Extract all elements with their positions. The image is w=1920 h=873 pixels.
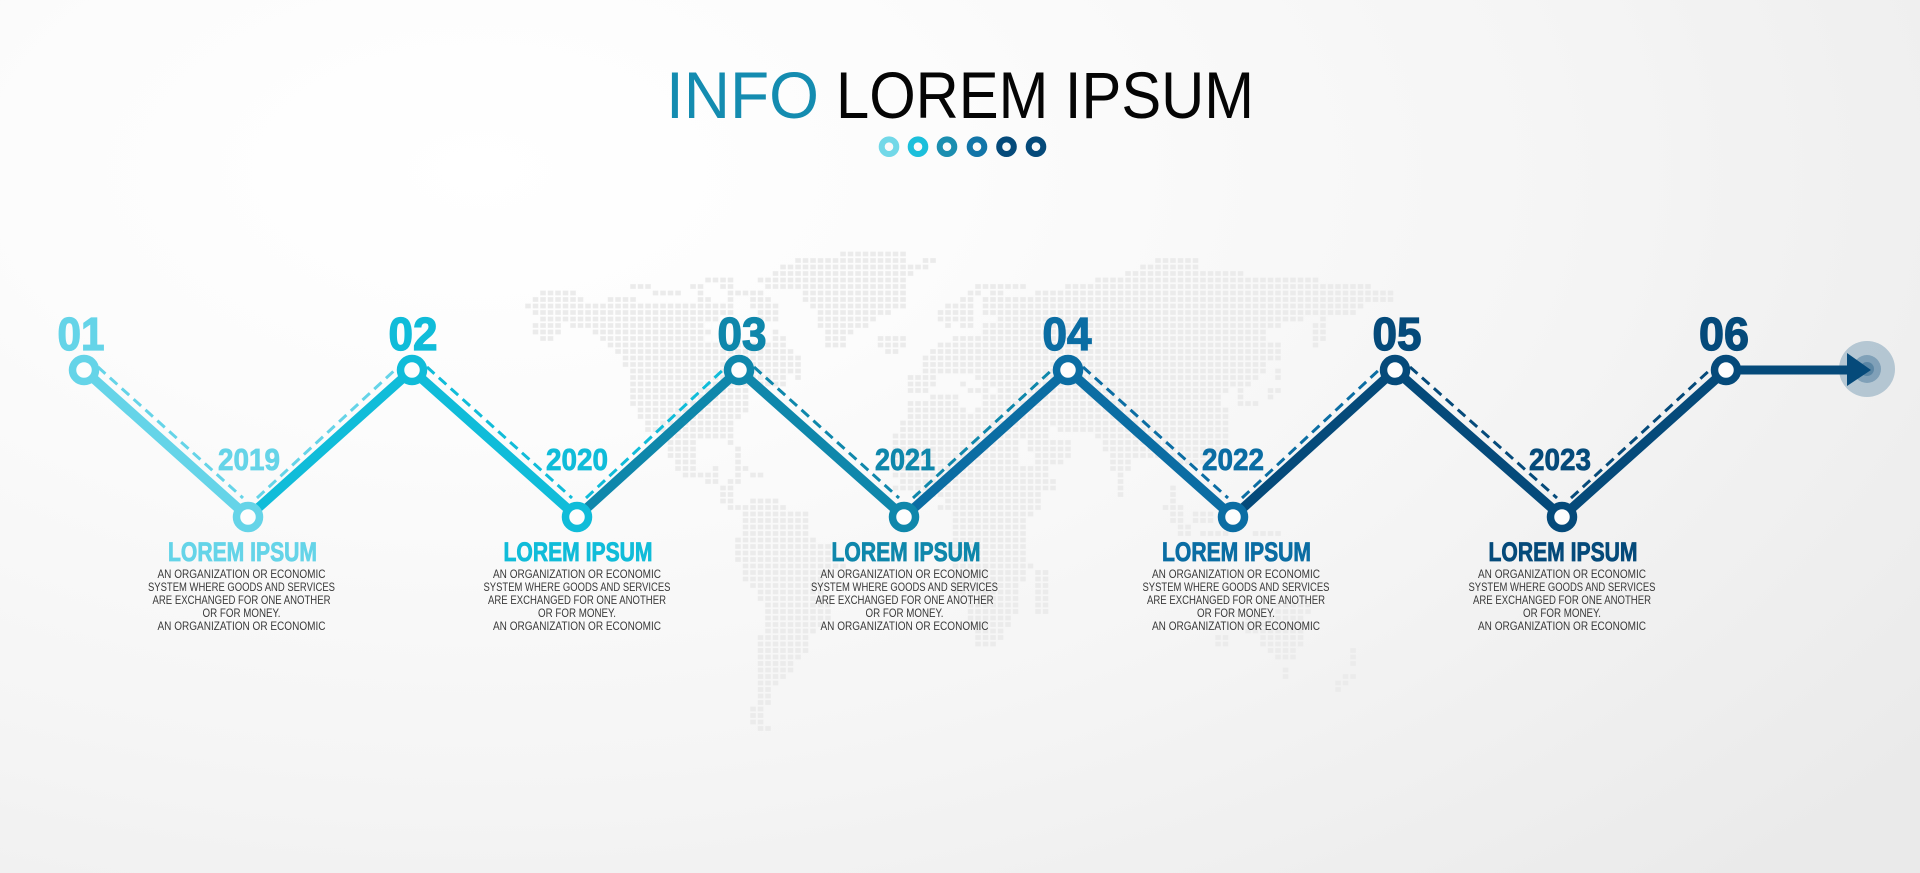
text block: step 5: OR FOR MONEY.: [1523, 606, 1601, 620]
text block: step 1: LOREM IPSUM: [168, 537, 317, 567]
text block: step 1: AN ORGANIZATION OR ECONOMIC: [158, 567, 326, 581]
year labels: 2021: [875, 442, 935, 477]
text block: step 3: OR FOR MONEY.: [866, 606, 944, 620]
text block: step 1: OR FOR MONEY.: [202, 606, 280, 620]
text block: step 4: OR FOR MONEY.: [1197, 606, 1275, 620]
title ring dots: [882, 139, 1043, 154]
title: LOREM IPSUM: [836, 58, 1254, 132]
arrow end with halo: [1726, 341, 1895, 397]
dotted world map: [525, 254, 1395, 728]
text block: step 5: SYSTEM WHERE GOODS AND SERVICES: [1468, 580, 1656, 594]
text block: step 2: LOREM IPSUM: [504, 537, 652, 567]
text block: step 4: LOREM IPSUM: [1162, 537, 1311, 567]
text block: step 4: AN ORGANIZATION OR ECONOMIC: [1152, 567, 1320, 581]
step numbers: 06: [1699, 308, 1749, 360]
step numbers: 05: [1372, 308, 1422, 360]
text block: step 1: AN ORGANIZATION OR ECONOMIC: [158, 619, 326, 633]
text block: step 1: ARE EXCHANGED FOR ONE ANOTHER: [152, 593, 330, 607]
title: [666, 58, 1254, 132]
text block: step 4: [1142, 537, 1330, 633]
text block: step 1: SYSTEM WHERE GOODS AND SERVICES: [148, 580, 335, 594]
text block: step 3: [811, 537, 998, 633]
text block: step 4: ARE EXCHANGED FOR ONE ANOTHER: [1147, 593, 1325, 607]
text block: step 5: AN ORGANIZATION OR ECONOMIC: [1478, 567, 1646, 581]
year labels: 2019: [218, 442, 280, 477]
dashed guide lines: [98, 367, 1712, 498]
text block: step 5: [1468, 537, 1656, 633]
text block: step 3: SYSTEM WHERE GOODS AND SERVICES: [811, 580, 998, 594]
text block: step 5: AN ORGANIZATION OR ECONOMIC: [1478, 619, 1646, 633]
year labels: [218, 442, 1591, 477]
year labels: 2020: [546, 442, 608, 477]
text block: step 2: [484, 537, 671, 633]
year labels: 2023: [1529, 442, 1591, 477]
text block: step 1: [148, 537, 335, 633]
step numbers: 03: [718, 308, 766, 360]
step numbers: 04: [1042, 308, 1092, 360]
text block: step 2: OR FOR MONEY.: [538, 606, 616, 620]
text block: step 2: AN ORGANIZATION OR ECONOMIC: [493, 567, 661, 581]
text block: step 2: ARE EXCHANGED FOR ONE ANOTHER: [488, 593, 666, 607]
text block: step 3: LOREM IPSUM: [832, 537, 980, 567]
text block: step 4: SYSTEM WHERE GOODS AND SERVICES: [1142, 580, 1330, 594]
text block: step 4: AN ORGANIZATION OR ECONOMIC: [1152, 619, 1320, 633]
text block: step 3: ARE EXCHANGED FOR ONE ANOTHER: [816, 593, 994, 607]
year labels: 2022: [1202, 442, 1264, 477]
step numbers: 01: [58, 308, 104, 360]
timeline nodes: [72, 358, 1738, 528]
text block: step 5: LOREM IPSUM: [1488, 537, 1638, 567]
zigzag timeline line: [84, 370, 1726, 517]
text block: step 5: ARE EXCHANGED FOR ONE ANOTHER: [1473, 593, 1651, 607]
step numbers: 02: [388, 308, 438, 360]
text block: step 2: AN ORGANIZATION OR ECONOMIC: [493, 619, 661, 633]
title: INFO: [666, 58, 819, 132]
text block: step 2: SYSTEM WHERE GOODS AND SERVICES: [484, 580, 671, 594]
text block: step 3: AN ORGANIZATION OR ECONOMIC: [820, 619, 989, 633]
step numbers: [58, 308, 1749, 360]
text block: step 3: AN ORGANIZATION OR ECONOMIC: [820, 567, 989, 581]
